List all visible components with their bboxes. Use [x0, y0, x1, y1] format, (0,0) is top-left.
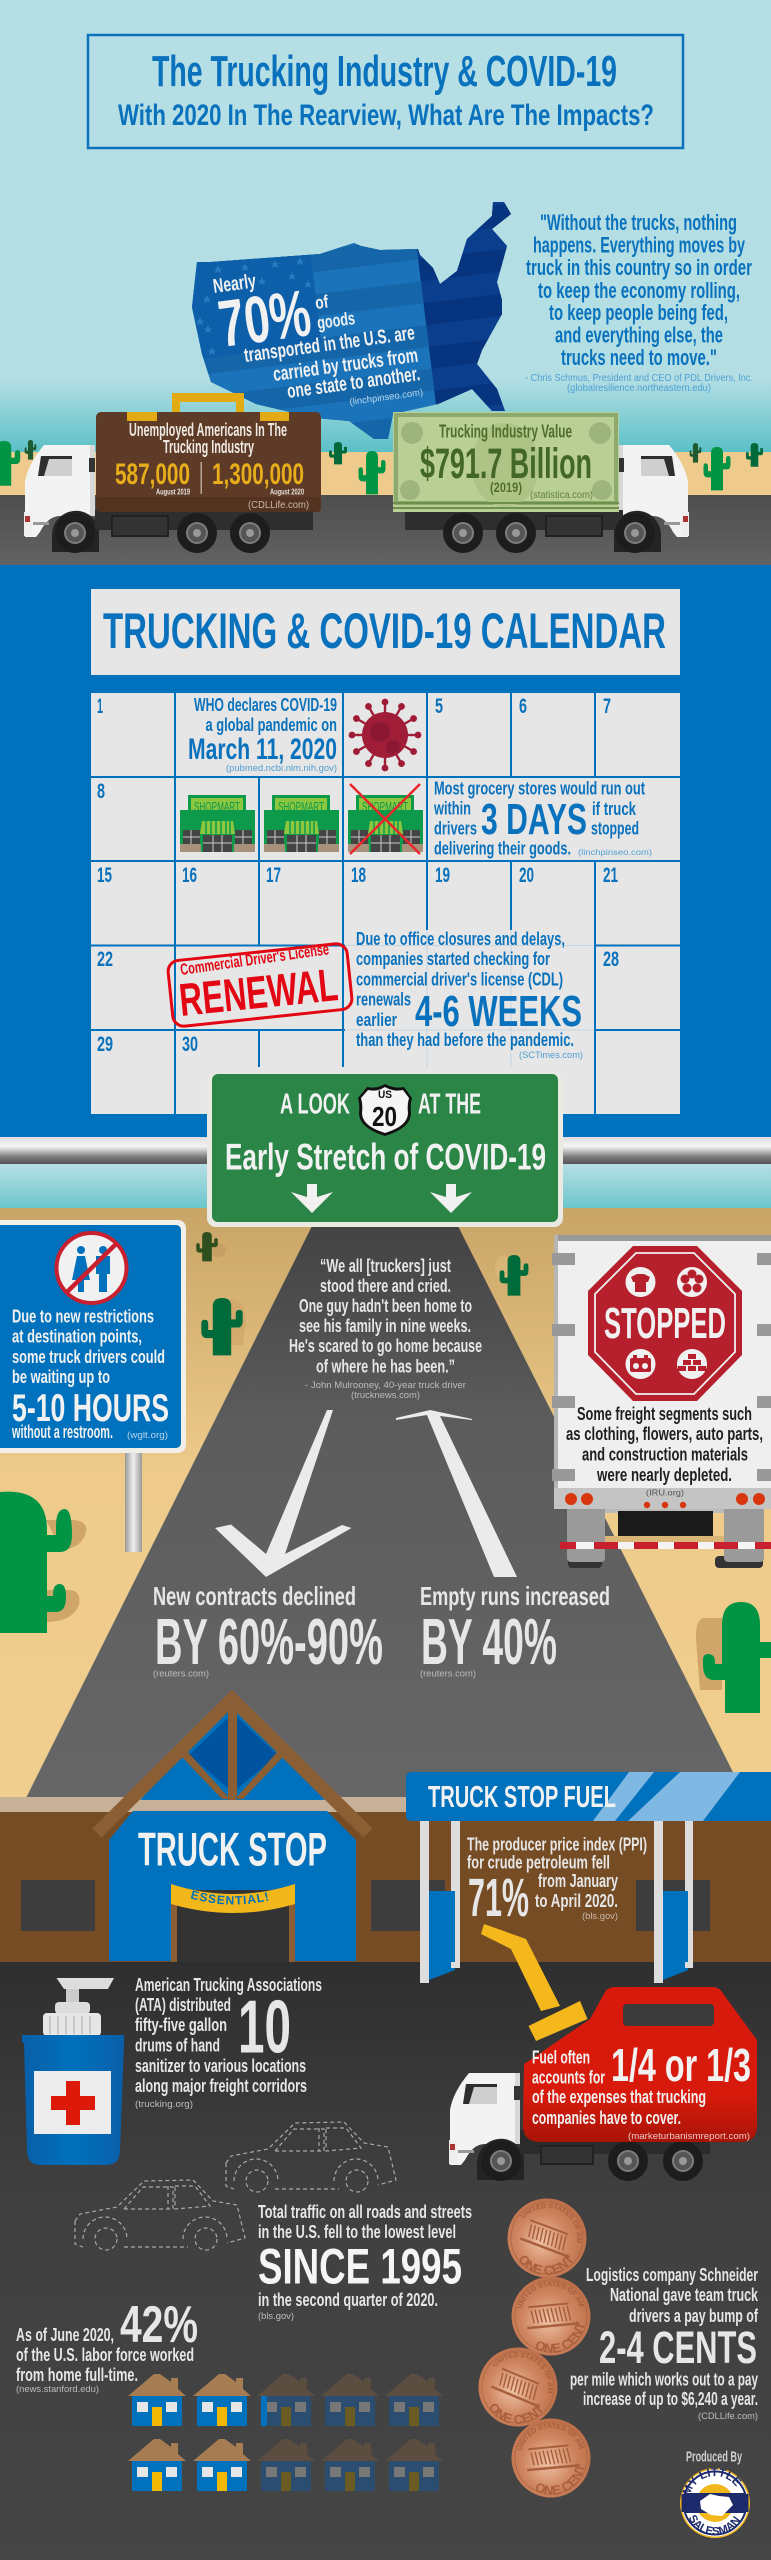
dollar bill: industry value: (statistica.com) — [530, 490, 593, 501]
work from home text: As of June 2020, — [16, 2325, 114, 2345]
grocery stores text: delivering their goods. — [434, 838, 571, 858]
pandemic declared text: (pubmed.ncbi.nlm.nih.gov) — [226, 763, 337, 774]
stat: new contracts declined: (reuters.com) — [153, 1668, 209, 1680]
70 percent statistic — [212, 270, 424, 408]
stat: new contracts declined — [153, 1581, 383, 1680]
70 percent statistic: goods — [316, 308, 356, 333]
icon: grocery stores: SHOPMART — [194, 799, 240, 814]
suitcase: unemployed Americans: Trucking Industry — [163, 437, 254, 457]
traffic text: SINCE 1995 — [258, 2238, 462, 2294]
icon: shirt — [631, 1274, 650, 1292]
producer price index text: for crude petroleum fell — [467, 1852, 610, 1872]
pennies: UNITED STATES OF AMERICA — [517, 2281, 584, 2308]
suitcase: unemployed Americans: 587,000 — [115, 458, 190, 491]
day numbers: 30 — [182, 1033, 198, 1056]
pay bump text — [570, 2265, 759, 2422]
pennies: ONE CENT — [536, 2464, 584, 2495]
fuel expenses text: Fuel often — [532, 2048, 590, 2068]
trucker quote: (trucknews.com) — [351, 1390, 420, 1401]
day numbers: 29 — [97, 1033, 113, 1056]
day numbers: 17 — [266, 864, 281, 887]
left truck with suitcase — [24, 393, 321, 553]
trucker quote: see his family in nine weeks. — [299, 1316, 471, 1336]
quote: Chris Schmus — [525, 210, 753, 394]
CDL renewals text: than they had before the pandemic. — [356, 1030, 574, 1050]
grocery stores text: drivers — [434, 818, 477, 838]
stat: new contracts declined: BY 60%-90% — [155, 1605, 383, 1678]
traffic text: (bls.gov) — [258, 2311, 294, 2322]
work from home text: of the U.S. labor force worked — [16, 2345, 194, 2365]
icon: flower — [680, 1270, 704, 1292]
day numbers: 28 — [603, 948, 619, 971]
section: dark lot — [0, 1924, 771, 2538]
icon: sanitizer bottle — [22, 1978, 124, 2165]
restroom restriction sign: be waiting up to — [12, 1367, 110, 1387]
icon: grocery stores: SHOPMART — [362, 799, 408, 814]
pandemic declared text — [188, 695, 337, 774]
restroom restriction sign: (wglt.org) — [127, 1430, 168, 1440]
trucker quote — [289, 1256, 482, 1401]
work from home text: 42% — [120, 2296, 198, 2354]
hand sanitizer text: 10 — [238, 1984, 291, 2068]
hand sanitizer text: (trucking.org) — [135, 2099, 193, 2110]
houses pictogram — [128, 2374, 443, 2491]
day numbers: 20 — [519, 864, 534, 887]
quote: Chris Schmus: (globalresilience.northeastern.edu) — [567, 383, 711, 394]
suitcase: unemployed Americans: August 2020 — [270, 488, 304, 496]
day numbers: 7 — [603, 695, 611, 718]
producer price index text — [467, 1834, 647, 1928]
pennies: UNITED STATES OF AMERICA — [517, 2423, 584, 2450]
dashed car lower — [75, 2180, 245, 2250]
day numbers: 6 — [519, 695, 527, 718]
stop sign — [588, 1246, 742, 1401]
fuel canopy — [406, 1772, 771, 1983]
grocery stores text — [433, 778, 652, 858]
pennies: ONE CENT — [536, 2322, 584, 2353]
pandemic declared text: March 11, 2020 — [188, 733, 337, 766]
restroom restriction sign — [0, 1220, 186, 1552]
section: desert road — [0, 1208, 771, 1800]
CDL renewals text: (SCTimes.com) — [519, 1050, 583, 1060]
70 percent statistic: carried by trucks from — [272, 345, 419, 386]
hand sanitizer text: along major freight corridors — [135, 2076, 307, 2096]
restroom restriction sign: Due to new restrictions — [12, 1306, 154, 1326]
freight segments text — [566, 1404, 763, 1485]
CDL renewals text: companies started checking for — [356, 949, 550, 969]
day numbers: 8 — [97, 780, 105, 803]
pandemic declared text: WHO declares COVID-19 — [194, 695, 337, 715]
work from home text: from home full-time. — [16, 2365, 138, 2385]
truck trailer rear: (IRU.org) — [646, 1488, 684, 1498]
CDL renewal stamp: RENEWAL — [177, 958, 340, 1026]
icon: virus — [349, 699, 421, 771]
highway sign: early stretch of COVID-19: A LOOK — [280, 1088, 350, 1120]
CDL renewals text — [356, 929, 583, 1060]
restroom restriction sign: at destination points, — [12, 1326, 142, 1346]
essential banner: ESSENTIAL! — [190, 1890, 268, 1904]
restroom restriction sign: some truck drivers could — [12, 1347, 165, 1367]
CDL renewals text: earlier — [356, 1010, 397, 1030]
grocery stores text: (linchpinseo.com) — [578, 847, 652, 857]
arrow: contracts down — [215, 1410, 352, 1577]
fuel expenses text: (marketurbanismreport.com) — [628, 2131, 750, 2142]
CDL renewals text: renewals — [356, 990, 411, 1010]
hand sanitizer text: drums of hand — [135, 2036, 220, 2056]
pennies: UNITED STATES OF AMERICA — [492, 2352, 553, 2394]
producer price index text: from January — [538, 1871, 618, 1891]
pump pole feet over lot — [420, 1962, 693, 1983]
suitcase: unemployed Americans — [96, 393, 321, 512]
restroom restriction sign: without a restroom. — [11, 1422, 113, 1442]
truck stop building — [92, 1690, 372, 1962]
pennies: ONE CENT — [490, 2404, 542, 2424]
icon: US 20 shield: US — [378, 1089, 392, 1101]
logo: My Little Salesman — [680, 2468, 750, 2538]
trucker quote: One guy hadn't been home to — [299, 1296, 472, 1316]
arrow: empty runs up — [396, 1410, 517, 1577]
guard rail and horizon — [0, 1137, 771, 1208]
dollar bill: industry value: (2019) — [490, 479, 522, 495]
CDL renewals text: Due to office closures and delays, — [356, 929, 565, 949]
trucker quote: “We all [truckers] just — [320, 1256, 451, 1276]
grocery stores text: 3 DAYS — [481, 795, 587, 844]
calendar header — [91, 589, 680, 675]
essential banner — [171, 1884, 295, 1913]
dollar bill: industry value: Trucking Industry Value — [439, 422, 572, 442]
truck trailer rear — [552, 1235, 771, 1568]
traffic text: in the U.S. fell to the lowest level — [258, 2222, 456, 2242]
quote: Chris Schmus: - Chris Schmus, President and CEO of PDL Drivers, Inc. — [525, 373, 753, 384]
fuel canopy: TRUCK STOP FUEL — [428, 1779, 616, 1814]
calendar grid — [91, 693, 680, 1114]
70 percent statistic: (linchpinseo.com) — [349, 387, 424, 408]
stat: empty runs increased: (reuters.com) — [420, 1668, 476, 1680]
day numbers: 21 — [603, 864, 618, 887]
suitcase: unemployed Americans: 1,300,000 — [212, 458, 304, 491]
icon: US 20 shield: 20 — [372, 1101, 397, 1132]
arrow: left down — [291, 1184, 333, 1213]
logo: My Little Salesman: SALESMAN — [689, 2515, 740, 2534]
traffic text: Total traffic on all roads and streets — [258, 2202, 472, 2222]
day numbers: 15 — [97, 864, 112, 887]
hand sanitizer text — [135, 1975, 322, 2110]
cacti — [0, 1232, 771, 1713]
pay bump text: (CDLLife.com) — [698, 2411, 758, 2422]
trucker quote: - John Mulrooney, 40-year truck driver — [305, 1380, 466, 1391]
traffic text: in the second quarter of 2020. — [258, 2290, 438, 2310]
70 percent statistic: of — [314, 291, 330, 313]
restroom restriction sign: 5-10 HOURS — [12, 1387, 169, 1430]
highway sign: early stretch of COVID-19 — [207, 1074, 563, 1227]
hand sanitizer text: (ATA) distributed — [135, 1995, 231, 2015]
section: truck stop — [0, 1690, 771, 1962]
dollar bill: industry value — [393, 412, 619, 512]
road — [25, 1220, 747, 1800]
icon: no restroom — [56, 1233, 126, 1303]
day numbers: 22 — [97, 948, 113, 971]
work from home text: (news.stanford.edu) — [16, 2384, 99, 2395]
pennies: ONE CENT — [520, 2254, 572, 2275]
arrow: right down — [430, 1184, 472, 1213]
highway sign: early stretch of COVID-19: AT THE — [418, 1088, 481, 1120]
trucker quote: He's scared to go home because — [289, 1336, 482, 1356]
title box — [88, 35, 683, 148]
day numbers: 19 — [435, 864, 450, 887]
grocery stores text: if truck — [592, 799, 637, 819]
suitcase: unemployed Americans: (CDLLife.com) — [248, 500, 309, 511]
producer credit — [680, 2448, 750, 2538]
CDL renewal stamp: Commercial Driver's License — [179, 941, 330, 979]
dollar bill: industry value: $791.7 Billion — [420, 440, 592, 488]
grocery stores text: within — [433, 798, 471, 818]
70 percent statistic: Nearly — [212, 270, 258, 298]
hand sanitizer text: American Trucking Associations — [135, 1975, 322, 1995]
US map flag — [192, 202, 511, 439]
logo: My Little Salesman: MY LITTLE — [682, 2468, 742, 2493]
highway sign: early stretch of COVID-19: Early Stretch of COVID-19 — [225, 1136, 546, 1178]
icon: bricks — [678, 1354, 706, 1371]
dashed car upper — [226, 2122, 396, 2192]
CDL renewals text: commercial driver's license (CDL) — [356, 970, 563, 990]
CDL renewal stamp — [167, 941, 353, 1027]
hand sanitizer text: sanitizer to various locations — [135, 2056, 306, 2076]
day numbers — [97, 695, 619, 1056]
cacti on horizon — [0, 440, 763, 494]
gas can on truck — [449, 1924, 757, 2181]
work from home text — [16, 2296, 198, 2395]
fuel expenses text: companies have to cover. — [532, 2108, 681, 2128]
grocery stores text: Most grocery stores would run out — [434, 778, 645, 798]
pennies — [478, 2198, 590, 2498]
day numbers: 5 — [435, 695, 443, 718]
icon: US 20 shield — [358, 1084, 412, 1136]
pandemic declared text: a global pandemic on — [206, 715, 337, 735]
hand sanitizer text: fifty-five gallon — [135, 2015, 227, 2035]
traffic text — [258, 2202, 472, 2322]
day numbers: 16 — [182, 864, 197, 887]
day numbers: 18 — [351, 864, 366, 887]
stat: new contracts declined: New contracts declined — [153, 1581, 356, 1611]
section: calendar — [0, 565, 771, 1137]
pennies: UNITED STATES OF AMERICA — [520, 2204, 582, 2243]
producer price index text: The producer price index (PPI) — [467, 1834, 647, 1854]
section: hero sky and highway — [0, 0, 771, 567]
70 percent statistic: one state to another. — [286, 363, 421, 403]
trucker quote: stood there and cried. — [320, 1276, 451, 1296]
day numbers: 1 — [97, 695, 103, 718]
70 percent statistic: 70% — [214, 275, 315, 361]
producer price index text: 71% — [468, 1868, 529, 1928]
suitcase: unemployed Americans: August 2019 — [156, 488, 190, 496]
icon: battery — [630, 1355, 651, 1372]
CDL renewals text: 4-6 WEEKS — [415, 987, 582, 1036]
icon: grocery stores — [180, 784, 423, 854]
suitcase: unemployed Americans: Unemployed Americans In The — [129, 420, 287, 440]
stat: empty runs increased — [420, 1581, 610, 1680]
producer price index text: (bls.gov) — [582, 1911, 618, 1921]
trucker quote: of where he has been.” — [316, 1356, 455, 1376]
fuel expenses text — [532, 2039, 751, 2142]
grocery stores text: stopped — [591, 818, 639, 838]
building windows — [21, 1880, 710, 1931]
icon: grocery stores: SHOPMART — [278, 799, 324, 814]
stat: empty runs increased: BY 40% — [421, 1605, 557, 1678]
producer price index text: to April 2020. — [535, 1891, 618, 1911]
70 percent statistic: transported in the U.S. are — [243, 322, 416, 367]
truck stop building: TRUCK STOP — [138, 1822, 327, 1876]
right truck with dollar bill — [393, 412, 689, 553]
stat: empty runs increased: Empty runs increased — [420, 1581, 610, 1611]
fuel expenses text: accounts for — [532, 2068, 605, 2088]
